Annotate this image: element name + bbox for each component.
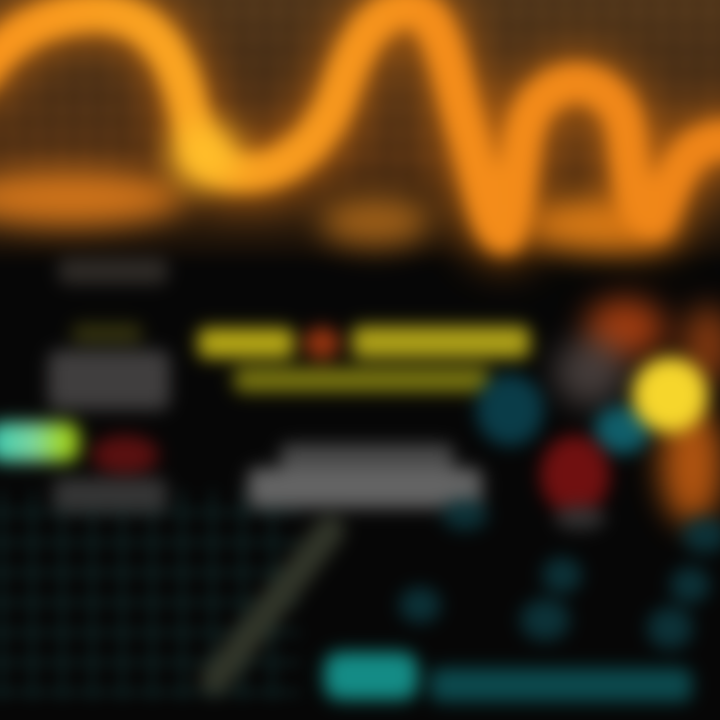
icon: left red mark xyxy=(91,435,159,475)
callout: cyan to green pill xyxy=(0,422,80,462)
chart: lower dim orange glow band xyxy=(0,170,675,253)
chart: orange line wave xyxy=(0,8,720,235)
text block: teal footer text xyxy=(430,668,692,702)
chart: bright yellow highlight xyxy=(171,123,239,187)
text block: small gray label under red circle xyxy=(554,506,606,530)
icon: teal circle xyxy=(476,374,650,454)
icon: yellow circle xyxy=(632,357,708,433)
callout: teal footer label xyxy=(324,652,418,700)
panel: top chart background xyxy=(0,0,720,260)
heading: yellow title bars xyxy=(198,326,530,392)
chart: olive diagonal stroke xyxy=(215,530,330,680)
panel: right orange glow xyxy=(554,298,720,525)
heading: faint gray top label xyxy=(58,258,168,284)
icon: red circle xyxy=(540,435,610,515)
panel: left dark teal grid xyxy=(0,490,300,700)
text block: left gray caption xyxy=(53,478,167,512)
text block: central gray text xyxy=(248,444,482,508)
text block: left gray stat xyxy=(48,324,170,410)
chart: teal data dots xyxy=(399,500,720,649)
